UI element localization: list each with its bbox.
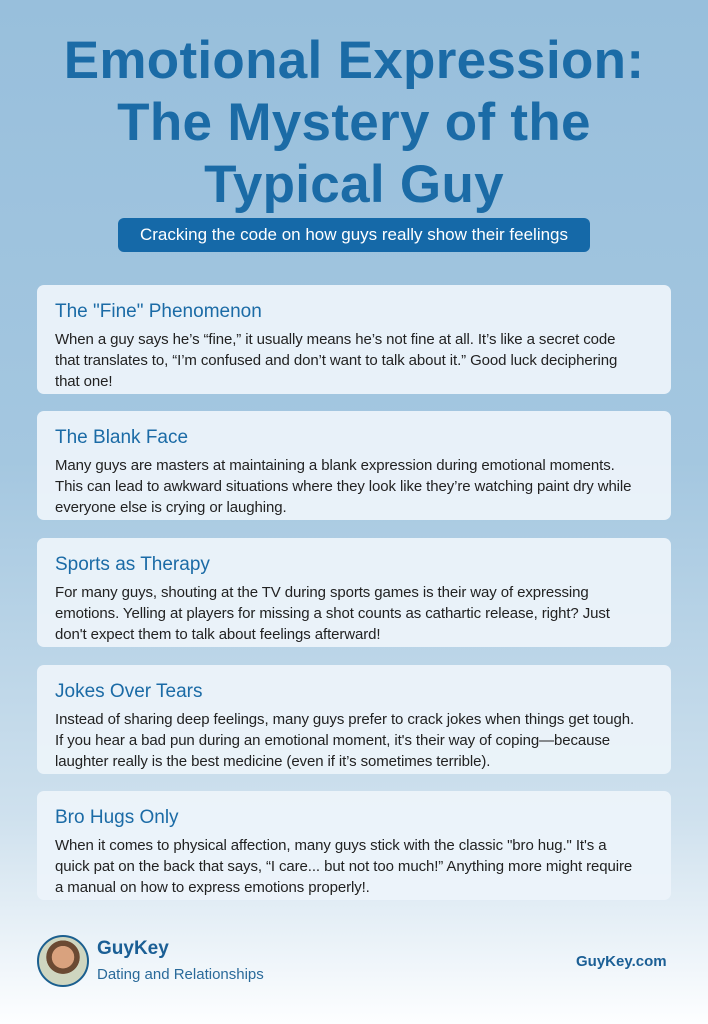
panel: sports as therapy: [37, 538, 671, 647]
panel: sports as therapy: Sports as Therapy: [55, 554, 210, 575]
icon: avatar logo: [37, 935, 89, 987]
website url: GuyKey.com: [576, 953, 667, 970]
panel: jokes over tears: Jokes Over Tears: [55, 681, 202, 702]
panel: jokes over tears: [37, 665, 671, 774]
title: Emotional Expression:: [64, 31, 644, 90]
subtitle pill: [118, 218, 590, 252]
panel: sports as therapy: For many guys, shouting at the TV during sports games is their way of expressing emotions. Yelling at players for missing a shot counts as cathartic release, right? Just don't expect them to talk about feelings afterward!: [55, 584, 610, 643]
panel: fine phenomenon: [37, 285, 671, 394]
title: Typical Guy: [204, 155, 504, 214]
panel: blank face: [37, 411, 671, 520]
subtitle pill: Cracking the code on how guys really show their feelings: [140, 225, 568, 244]
panel: bro hugs: [37, 791, 671, 900]
panel: jokes over tears: Instead of sharing deep feelings, many guys prefer to crack jokes when things get tough. If you hear a bad pun during an emotional moment, it's their way of coping—because laughter really is the best medicine (even if it’s sometimes terrible).: [55, 711, 634, 770]
brand name: GuyKey: [97, 938, 169, 959]
title: [64, 31, 644, 214]
panel: fine phenomenon: The "Fine" Phenomenon: [55, 301, 262, 322]
panel: bro hugs: When it comes to physical affection, many guys stick with the classic "bro hug." It's a quick pat on the back that says, “I care... but not too much!” Anything more might require a manual on how to express emotions properly!.: [55, 837, 632, 896]
brand tagline: Dating and Relationships: [97, 966, 264, 983]
title: The Mystery of the: [117, 93, 591, 152]
panel: fine phenomenon: When a guy says he’s “fine,” it usually means he’s not fine at all. It’s like a secret code that translates to, “I’m confused and don’t want to talk about it.” Good luck deciphering that one!: [55, 331, 617, 390]
panel: blank face: The Blank Face: [55, 427, 188, 448]
panel: bro hugs: Bro Hugs Only: [55, 807, 179, 828]
panel: blank face: Many guys are masters at maintaining a blank expression during emotional moments. This can lead to awkward situations where they look like they’re watching paint dry while everyone else is crying or laughing.: [55, 457, 631, 516]
